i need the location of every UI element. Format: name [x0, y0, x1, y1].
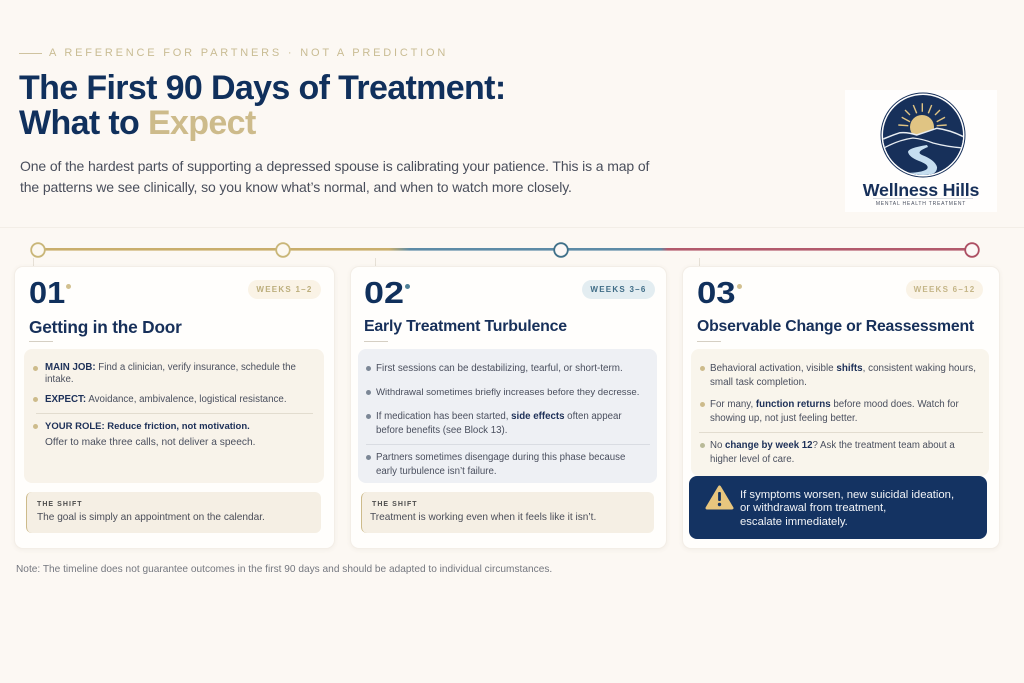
heading: Observable Change or Reassessment [697, 318, 974, 335]
panel: the shift: THE SHIFT [37, 501, 83, 508]
number 02: 02 [364, 275, 404, 310]
intro text: the patterns we see clinically, so you know what’s normal, and when to watch more closely. [20, 179, 572, 195]
bullet 2: For many, function returns before mood does. Watch for [710, 399, 959, 410]
callout text: escalate immediately. [740, 516, 848, 528]
panel: the shift [361, 492, 654, 533]
pill: weeks 1-2: WEEKS 1–2 [256, 285, 313, 294]
callout: escalate [689, 476, 987, 539]
bullet 1: small task completion. [710, 377, 807, 388]
title: What to Expect [19, 104, 256, 142]
intro text: One of the hardest parts of supporting a depressed spouse is calibrating your patience. This is a map of [20, 158, 649, 174]
pill: weeks 3-6: WEEKS 3–6 [590, 285, 647, 294]
number 01: 01 [29, 275, 65, 310]
main job: MAIN JOB: Find a clinician, verify insurance, schedule the [45, 362, 296, 373]
content box [358, 349, 657, 483]
callout text [740, 489, 954, 528]
logo tagline: MENTAL HEALTH TREATMENT [876, 201, 966, 207]
expect: EXPECT: Avoidance, ambivalence, logistical resistance. [45, 394, 287, 405]
bullet 1 [710, 363, 976, 388]
number 03: 03 [697, 275, 736, 310]
icon: warning [706, 485, 734, 510]
content box [691, 349, 989, 476]
bullet 2 [710, 399, 959, 424]
callout text: or withdrawal from treatment, [740, 502, 886, 514]
bullet 1: First sessions can be destabilizing, tearful, or short-term. [376, 363, 623, 374]
heading: Early Treatment Turbulence [364, 318, 567, 335]
bullet 2: showing up, not just feeling better. [710, 413, 857, 424]
bullet 3: If medication has been started, side effects often appear [376, 411, 622, 422]
bullet 3: before benefits (see Block 13). [376, 425, 507, 436]
bullet 3 [376, 411, 622, 436]
title [19, 69, 506, 142]
bullet 3 [710, 440, 955, 465]
bullet 4: early turbulence isn’t failure. [376, 466, 497, 477]
logo wordmark: Wellness Hills [863, 180, 979, 200]
pill: weeks 6-12 [906, 280, 983, 299]
panel: card 2 [350, 266, 667, 549]
panel: card 1 [14, 266, 335, 549]
main job [45, 362, 296, 385]
bullet 3: No change by week 12? Ask the treatment team about a [710, 440, 955, 451]
heading: Getting in the Door [29, 317, 182, 337]
panel: the shift [26, 492, 321, 533]
icon: sunrise over hills [880, 92, 966, 178]
bullet 4 [376, 452, 625, 477]
pill: weeks 6-12: WEEKS 6–12 [914, 285, 975, 294]
bullet 4: Partners sometimes disengage during this phase because [376, 452, 625, 463]
your role: Offer to make three calls, not deliver a speech. [45, 436, 255, 448]
header divider [0, 227, 1024, 228]
logo [845, 90, 997, 212]
eyebrow: A REFERENCE FOR PARTNERS · NOT A PREDICTION [49, 47, 448, 59]
intro text [20, 158, 650, 195]
bullet 2: Withdrawal sometimes briefly increases before they decresse. [376, 387, 639, 398]
bullet 3: higher level of care. [710, 454, 794, 465]
pill: weeks 1-2 [248, 280, 321, 299]
panel: the shift: Treatment is working even when it feels like it isn’t. [370, 512, 596, 523]
panel: the shift: The goal is simply an appointment on the calendar. [37, 512, 265, 523]
title: The First 90 Days of Treatment: [19, 69, 506, 107]
footnote: Note: The timeline does not guarantee outcomes in the first 90 days and should be adapted to individual circumstances. [16, 564, 552, 575]
bullet 1: Behavioral activation, visible shifts, consistent waking hours, [710, 363, 976, 374]
pill: weeks 3-6 [582, 280, 655, 299]
timeline [30, 242, 980, 258]
panel: card 3 [682, 266, 1000, 549]
content box [24, 349, 324, 483]
main job: intake. [45, 374, 74, 385]
your role [45, 421, 255, 448]
panel: the shift: THE SHIFT [372, 501, 418, 508]
callout text: If symptoms worsen, new suicidal ideation, [740, 489, 954, 501]
your role: YOUR ROLE: Reduce friction, not motivation. [45, 421, 250, 432]
